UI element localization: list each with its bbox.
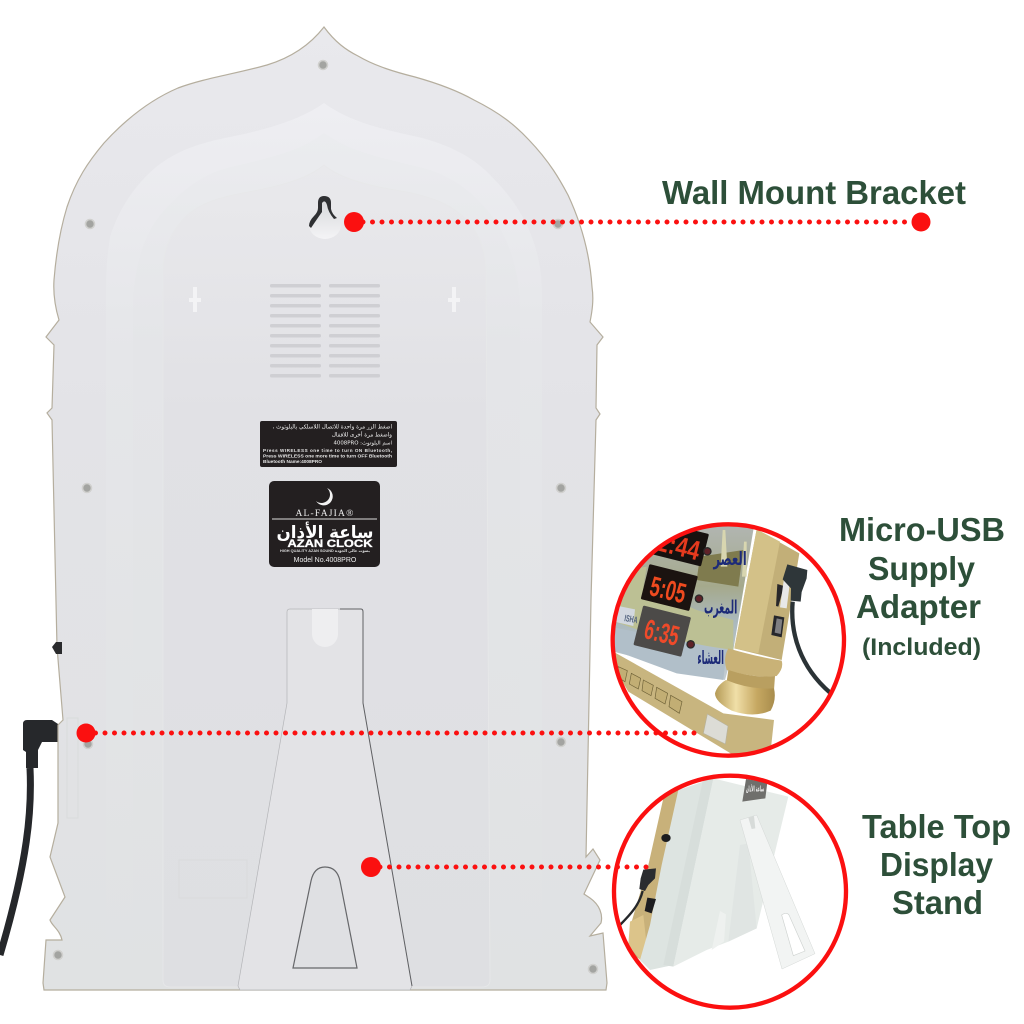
crescent logo	[316, 488, 333, 505]
close-up image content	[620, 779, 815, 970]
LED display 2:44: 2:44	[654, 526, 704, 566]
label: table top display stand	[862, 808, 1011, 921]
USB port panel	[645, 898, 656, 913]
speaker vent grille	[270, 284, 380, 378]
Arabic prayer names	[697, 548, 747, 668]
column base neck	[727, 670, 775, 690]
middle band	[133, 133, 520, 987]
bluetooth instruction sticker: Press WIRELESS one more time to turn OFF Bluetooth	[263, 454, 392, 458]
Arabic prayer names: العشاء	[697, 647, 724, 668]
prayer indicator lights	[687, 548, 711, 648]
ISHA tag	[614, 606, 635, 626]
label: table top display stand: Stand	[892, 884, 983, 921]
inner panel	[163, 165, 490, 987]
fold-out stand	[238, 609, 412, 990]
stand window	[293, 867, 357, 968]
body outline and shape	[43, 27, 607, 990]
LED display 6:35: 6:35	[641, 613, 682, 652]
clock back body	[43, 27, 607, 990]
red circle ring	[613, 524, 844, 756]
detail circle: micro-USB adapter close-up	[610, 522, 846, 758]
callout line: micro-USB	[76, 724, 695, 742]
gold clock side	[632, 790, 678, 960]
close-up image content: ISHA	[624, 613, 639, 625]
USB ports	[776, 584, 783, 607]
white body back	[673, 778, 788, 967]
black brand label	[742, 779, 767, 802]
minarets	[721, 530, 747, 577]
keyhole wall mount bracket slot	[309, 196, 341, 239]
Al-Fajia brand label: ساعة الأذان	[276, 522, 374, 543]
detail circle: table-top stand close-up	[612, 774, 848, 1010]
Arabic prayer names: المغرب	[704, 596, 737, 618]
label: micro-USB supply adapter: Adapter	[856, 588, 981, 625]
stand right shadow edge	[340, 609, 412, 986]
white body side	[640, 782, 702, 970]
callout line: table stand	[361, 857, 650, 877]
stand window	[782, 913, 805, 956]
side column	[734, 529, 799, 660]
Al-Fajia brand label	[269, 481, 380, 567]
power knob	[661, 834, 671, 842]
column base collar	[725, 648, 782, 677]
bluetooth instruction sticker: Bluetooth Name:4008PRO	[263, 459, 322, 464]
screws	[54, 60, 598, 974]
stand notch	[312, 609, 338, 647]
Al-Fajia brand label: HIGH QUALITY AZAN SOUND بصوت عالي الجودة	[280, 549, 371, 553]
bluetooth instruction sticker: اضغط الزر مرة واحدة للاتصال اللاسلكي بالبلوتوث ،	[273, 424, 392, 430]
red circle ring	[614, 776, 846, 1008]
stand slot	[748, 816, 755, 829]
LED display 6:35	[633, 605, 691, 657]
power cable on left	[0, 720, 58, 955]
keypad buttons	[617, 667, 682, 713]
close-up image content	[614, 526, 830, 754]
label: micro-USB supply adapter: Supply	[868, 550, 976, 587]
silver button	[703, 714, 728, 744]
plus shaped moulding marks	[189, 287, 460, 312]
micro-USB plug and cable	[792, 602, 830, 693]
gold base ornament	[628, 915, 647, 962]
lower front bar	[616, 653, 774, 754]
bluetooth instruction sticker	[260, 421, 397, 467]
label: micro-USB supply adapter: (Included)	[862, 634, 981, 661]
Al-Fajia brand label: AZAN CLOCK	[288, 538, 373, 550]
side knob	[52, 642, 62, 654]
LED display 5:05: 5:05	[647, 570, 689, 609]
Al-Fajia brand label: AL-FAJIA®	[295, 508, 355, 519]
CE and compliance marks	[67, 718, 247, 898]
USB cable and plug	[620, 891, 643, 925]
label: micro-USB supply adapter: Micro-USB	[839, 511, 1005, 548]
LED display 5:05	[641, 564, 698, 611]
label: table top display stand: Display	[880, 846, 994, 883]
label: wall mount bracket: Wall Mount Bracket	[662, 174, 966, 211]
callout line: wall mount bracket	[344, 212, 930, 232]
body foot ridge	[712, 946, 717, 950]
photo face	[615, 526, 754, 680]
bluetooth instruction sticker: Press WIRELESS one time to turn ON Bluetooth,	[263, 448, 392, 453]
folding stand	[740, 815, 815, 969]
bluetooth instruction sticker: واضغط مرة أخرى للاقفال	[332, 430, 392, 438]
Al-Fajia brand label: Model No.4008PRO	[294, 557, 357, 564]
raised outer band	[106, 103, 542, 987]
mosque courtyard	[697, 550, 743, 587]
label: table top display stand: Table Top	[862, 808, 1011, 845]
Arabic prayer names: العصر	[713, 548, 747, 570]
close-up image content: ساعة الأذان	[746, 784, 764, 794]
label: micro-USB supply adapter	[839, 511, 1005, 661]
column base ball	[715, 680, 775, 714]
bluetooth instruction sticker: اسم البلوتوث: 4008PRO	[333, 440, 392, 446]
